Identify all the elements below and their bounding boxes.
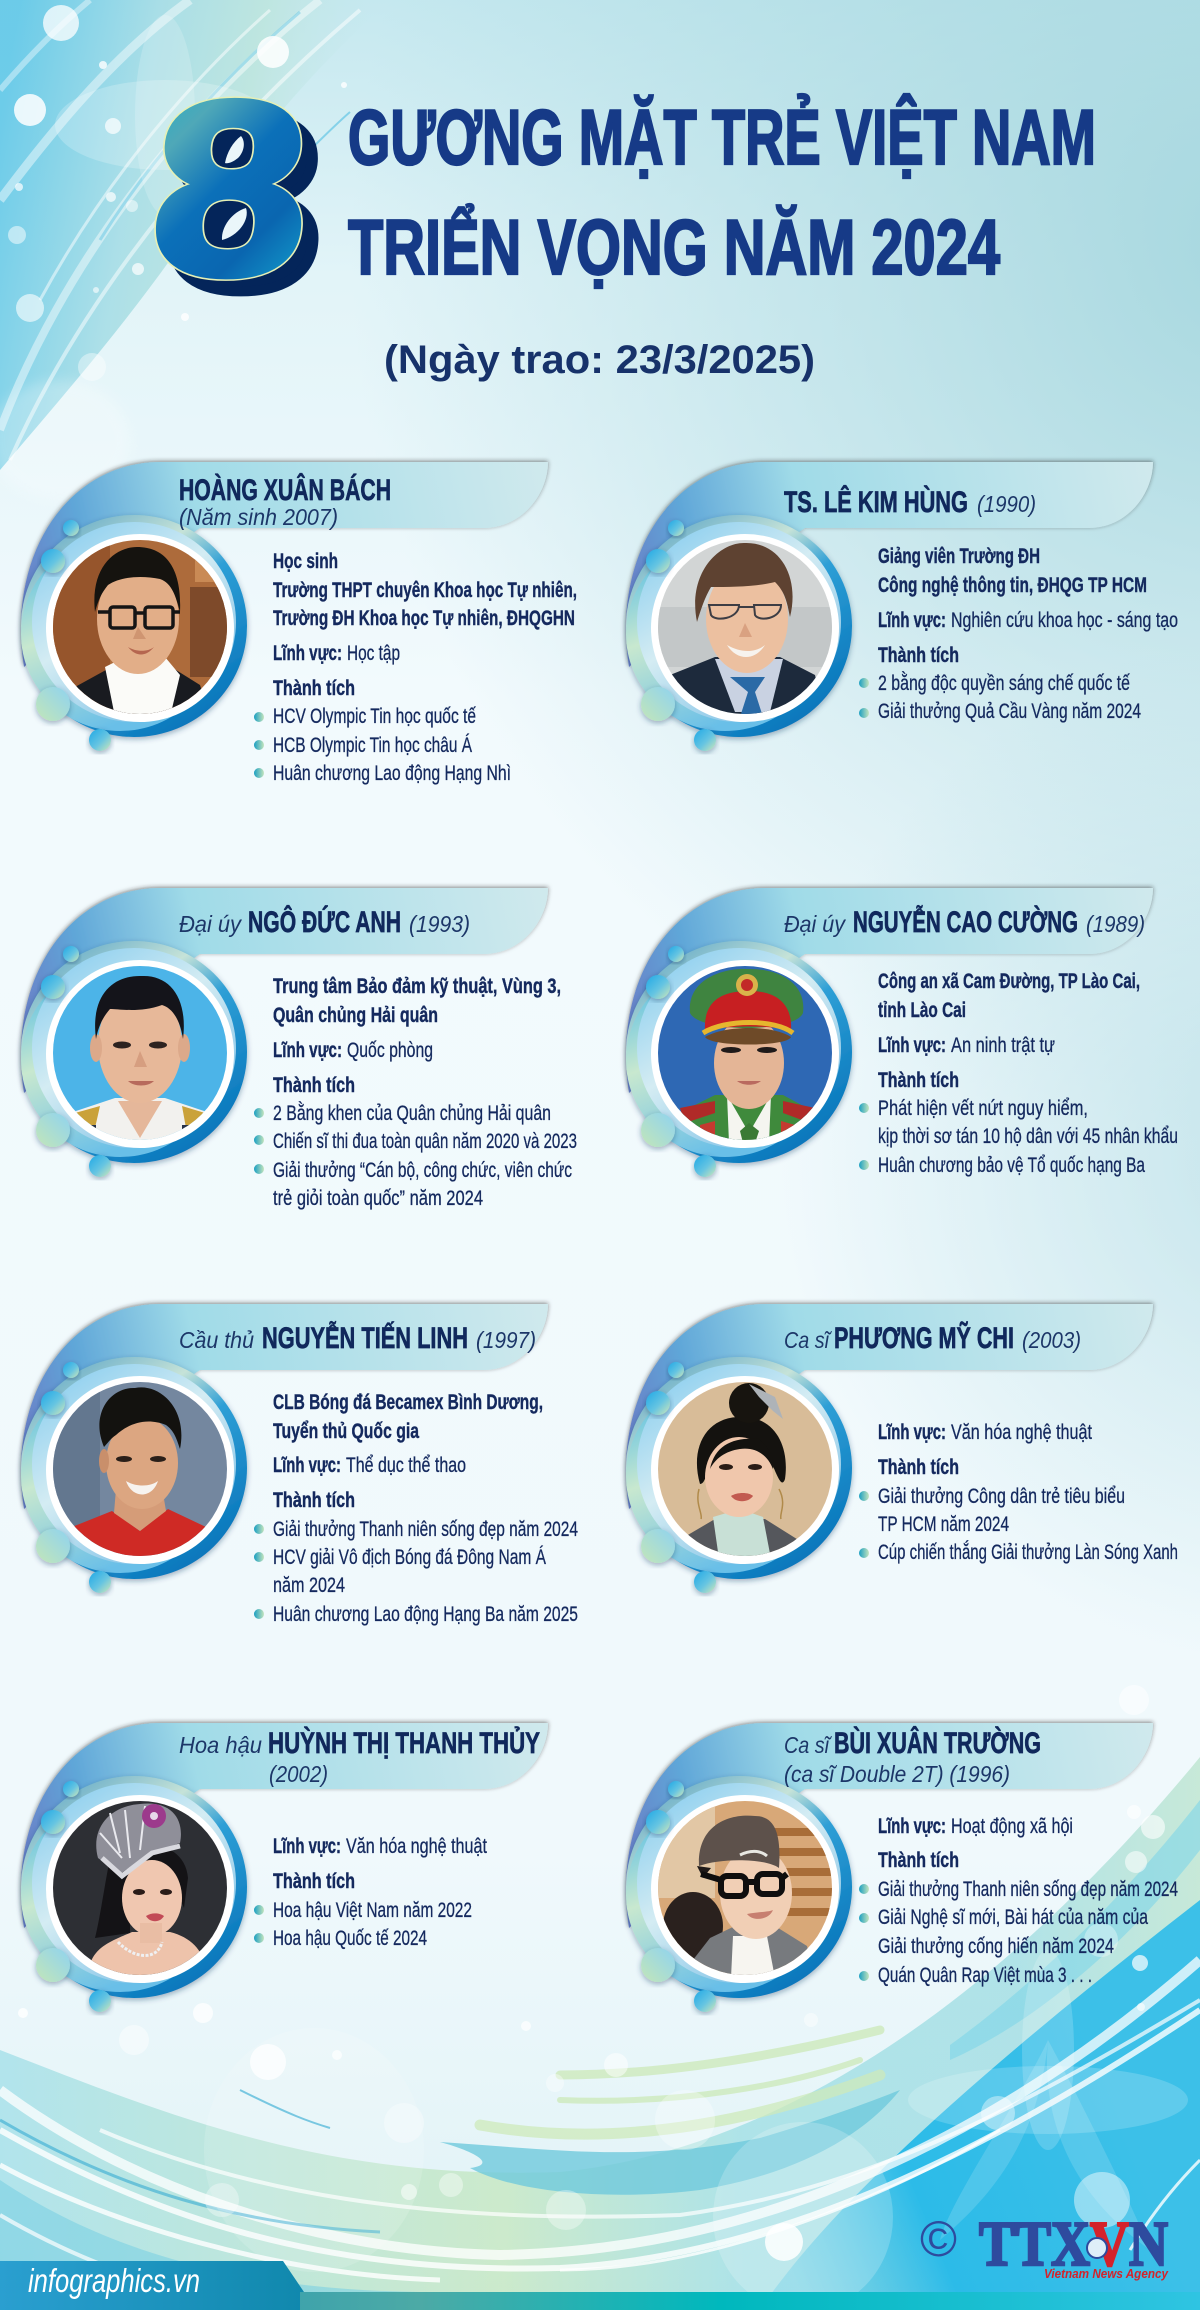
panel: Nguyễn Tiến Linh [21, 1304, 578, 1626]
details [254, 1390, 578, 1626]
details: Thành tích [878, 1068, 959, 1092]
panel: Nguyễn Cao Cường [626, 888, 1178, 1177]
details: Quốc phòng [347, 1038, 433, 1062]
details: Giải thưởng Thanh niên sống đẹp năm 2024 [273, 1517, 578, 1541]
panel: Bùi Xuân Trường [626, 1723, 1178, 2012]
portrait: Ngô Đức Anh [50, 963, 230, 1143]
details [254, 1834, 487, 1950]
name: (1993) [409, 911, 470, 937]
details: Hoa hậu Việt Nam năm 2022 [273, 1898, 472, 1922]
name [179, 1726, 540, 1787]
details: Văn hóa nghệ thuật [951, 1420, 1092, 1444]
details: Lĩnh vực: [878, 1420, 946, 1444]
name: (1997) [476, 1327, 536, 1353]
details: Lĩnh vực: [273, 1834, 341, 1858]
details: Giảng viên Trường ĐH [878, 544, 1040, 568]
name: Ca sĩ [784, 1327, 832, 1353]
details: 2 Bằng khen của Quân chủng Hải quân [273, 1100, 551, 1125]
name [784, 1726, 1041, 1787]
details: Thành tích [273, 1073, 355, 1097]
details: HCB Olympic Tin học châu Á [273, 732, 472, 757]
big numeral 8: 8 [145, 50, 316, 327]
details: Lĩnh vực: [878, 1033, 946, 1057]
name: Cầu thủ [179, 1327, 254, 1353]
name: Ca sĩ [784, 1732, 832, 1758]
name: BÙI XUÂN TRƯỜNG [834, 1726, 1041, 1760]
portrait: Bùi Xuân Trường [655, 1798, 835, 1978]
footer band [0, 2261, 1200, 2310]
panel: Huỳnh Thị Thanh Thủy [21, 1723, 548, 2012]
details: năm 2024 [273, 1573, 345, 1597]
details: Lĩnh vực: [878, 1814, 946, 1838]
portrait: Nguyễn Tiến Linh [50, 1379, 230, 1559]
name: Hoa hậu [179, 1732, 262, 1758]
panel: Ngô Đức Anh [21, 888, 577, 1210]
details [254, 549, 577, 785]
details: Hoa hậu Quốc tế 2024 [273, 1926, 427, 1950]
name: (2003) [1022, 1327, 1081, 1353]
name: (1989) [1086, 911, 1145, 937]
details: Chiến sĩ thi đua toàn quân năm 2020 và 2023 [273, 1129, 577, 1153]
name: (2002) [269, 1761, 328, 1787]
details: Thành tích [273, 1869, 355, 1893]
details: Lĩnh vực: [878, 608, 946, 632]
details: Thành tích [878, 1455, 959, 1479]
details: Thành tích [273, 1488, 355, 1512]
portrait: Huỳnh Thị Thanh Thủy [50, 1798, 230, 1978]
details: CLB Bóng đá Becamex Bình Dương, [273, 1390, 543, 1414]
details: HCV giải Vô địch Bóng đá Đông Nam Á [273, 1544, 546, 1569]
details: Lĩnh vực: [273, 1038, 342, 1062]
name: PHƯƠNG MỸ CHI [834, 1321, 1014, 1355]
details: Giải thưởng cống hiến năm 2024 [878, 1934, 1114, 1958]
name: TS. LÊ KIM HÙNG [784, 485, 968, 519]
details: Hoạt động xã hội [951, 1814, 1073, 1838]
details [859, 544, 1178, 723]
details: Quán Quân Rap Việt mùa 3 . . . [878, 1963, 1092, 1987]
details: Trường ĐH Khoa học Tự nhiên, ĐHQGHN [273, 606, 575, 630]
logo: TTXVN: TTXVN [979, 2208, 1168, 2279]
details: Thành tích [878, 1848, 959, 1872]
details [254, 974, 577, 1210]
details: Tuyển thủ Quốc gia [273, 1419, 420, 1443]
decoration: bottom swooshes [0, 1685, 1200, 2310]
details: An ninh trật tự [951, 1033, 1055, 1057]
name: NGUYỄN TIẾN LINH [262, 1321, 468, 1355]
details [859, 1420, 1178, 1564]
details: trẻ giỏi toàn quốc” năm 2024 [273, 1186, 483, 1210]
portrait: Lê Kim Hùng [655, 537, 835, 717]
details: Thành tích [878, 643, 959, 667]
panel: Hoàng Xuân Bách: (Năm sinh 2007) [179, 504, 338, 530]
name: Đại úy [179, 911, 242, 937]
details: Quân chủng Hải quân [273, 1003, 438, 1027]
name: Đại úy [784, 911, 846, 937]
portrait: Nguyễn Cao Cường [655, 963, 835, 1143]
details: Học sinh [273, 549, 338, 573]
details: Thành tích [273, 676, 355, 700]
title [348, 93, 1096, 291]
footer: site name: infographics.vn [28, 2262, 200, 2299]
panel: Lê Kim Hùng [626, 462, 1178, 751]
panel: Phương Mỹ Chi [626, 1304, 1178, 1593]
details: Phát hiện vết nứt nguy hiểm, [878, 1096, 1088, 1120]
logo: TTXVN: © [920, 2211, 957, 2267]
panel: Hoàng Xuân Bách [21, 462, 577, 785]
name: HOÀNG XUÂN BÁCH [179, 473, 391, 507]
name: NGUYỄN CAO CƯỜNG [853, 905, 1078, 939]
details: Văn hóa nghệ thuật [346, 1834, 487, 1858]
details: Học tập [347, 641, 400, 665]
details: tỉnh Lào Cai [878, 998, 966, 1022]
big numeral 8: 8 [145, 50, 316, 327]
name: HUỲNH THỊ THANH THỦY [268, 1726, 540, 1760]
details: Huân chương Lao động Hạng Nhì [273, 761, 511, 785]
details: Lĩnh vực: [273, 641, 342, 665]
details: Thể dục thể thao [346, 1453, 466, 1477]
details [859, 1814, 1178, 1987]
name: (1990) [977, 491, 1036, 517]
details: Lĩnh vực: [273, 1453, 341, 1477]
decoration: top-left swooshes [0, 0, 390, 500]
details: HCV Olympic Tin học quốc tế [273, 704, 476, 728]
logo: TTXVN: Vietnam News Agency [1044, 2266, 1169, 2281]
portrait: Hoàng Xuân Bách [50, 537, 230, 717]
details: Huân chương Lao động Hạng Ba năm 2025 [273, 1602, 578, 1626]
name: (ca sĩ Double 2T) (1996) [784, 1761, 1010, 1787]
name: NGÔ ĐỨC ANH [248, 905, 401, 939]
details [859, 969, 1178, 1177]
details: Trung tâm Bảo đảm kỹ thuật, Vùng 3, [273, 974, 561, 998]
details: TP HCM năm 2024 [878, 1512, 1009, 1536]
big numeral 8: 8 [160, 65, 331, 342]
portrait: Phương Mỹ Chi [655, 1379, 835, 1559]
details: Giải thưởng “Cán bộ, công chức, viên chức [273, 1158, 572, 1182]
details: Trường THPT chuyên Khoa học Tự nhiên, [273, 578, 577, 602]
subtitle: award date: (Ngày trao: 23/3/2025) [384, 338, 815, 382]
